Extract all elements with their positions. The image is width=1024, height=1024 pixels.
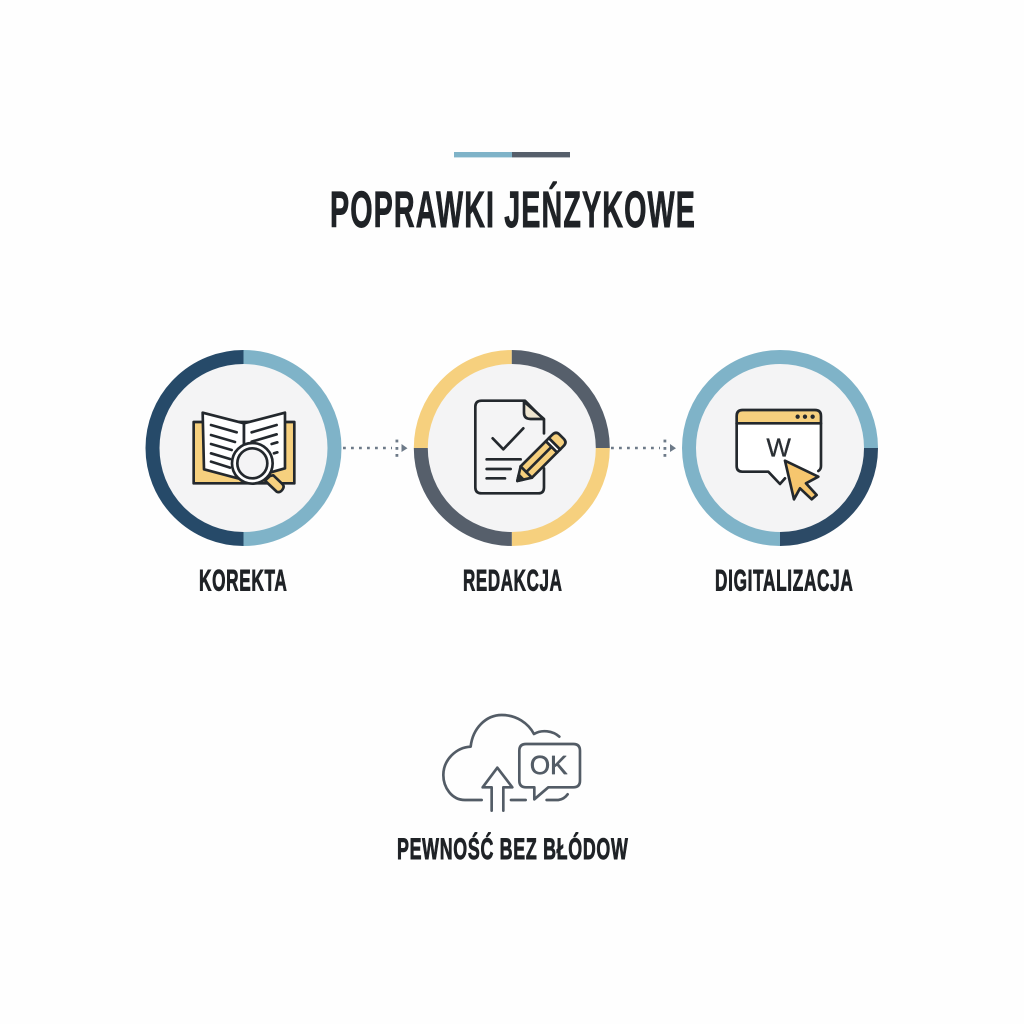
panel: korekta bbox=[152, 357, 334, 598]
ring: digitalizacja bbox=[689, 357, 871, 539]
icon: open book with magnifier bbox=[194, 413, 294, 492]
arrow: korekta to redakcja bbox=[343, 440, 408, 457]
label: pewność bez błędów: PEWNOŚĆ BEZ BŁÓDOW bbox=[397, 832, 628, 866]
icon: browser window with cursor: W bbox=[766, 433, 791, 463]
icon: document with pencil bbox=[475, 401, 567, 493]
icon: cloud with upload arrow and OK bubble: OK bbox=[530, 750, 568, 780]
ring: redakcja bbox=[421, 357, 603, 539]
title: POPRAWKI JEŃZYKOWE bbox=[330, 181, 696, 238]
label: korekta: KOREKTA bbox=[199, 564, 288, 598]
accent bar bbox=[454, 152, 570, 157]
arrow: redakcja to digitalizacja bbox=[611, 440, 676, 457]
panel: redakcja bbox=[421, 357, 603, 598]
icon: browser window with cursor bbox=[737, 410, 821, 499]
label: digitalizacja: DIGITALIZACJA bbox=[715, 564, 854, 598]
icon: cloud with upload arrow and OK bubble bbox=[443, 715, 580, 811]
panel: pewność bez błędów bbox=[397, 715, 628, 866]
label: redakcja: REDAKCJA bbox=[463, 564, 562, 598]
ring: korekta bbox=[152, 357, 334, 539]
panel: digitalizacja bbox=[689, 357, 871, 598]
